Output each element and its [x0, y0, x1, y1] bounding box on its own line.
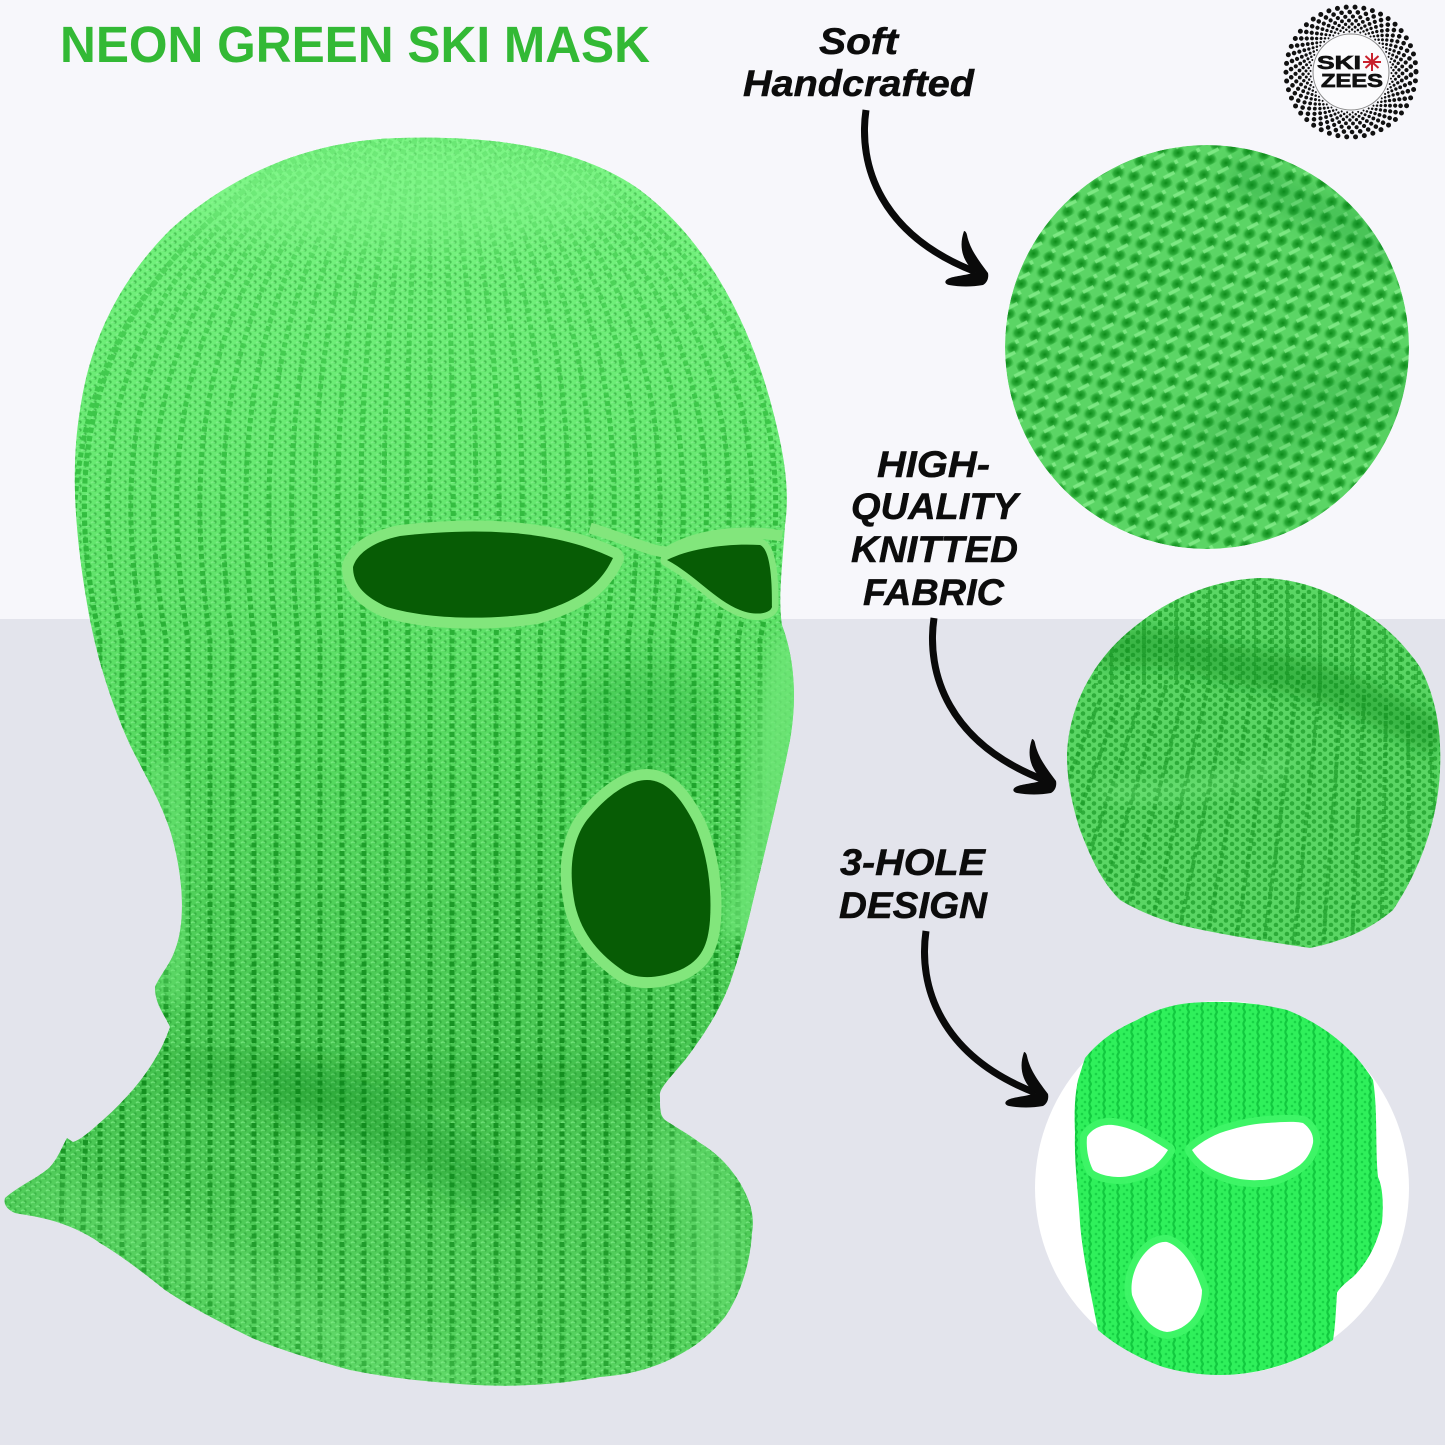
label: high-quality knitted fabric: HIGH- — [877, 444, 990, 485]
label: high-quality knitted fabric — [851, 444, 1021, 613]
logo: Ski Zees: SKI — [1317, 53, 1361, 73]
label: 3-hole design — [839, 842, 988, 926]
label: 3-hole design: 3-HOLE — [840, 842, 986, 883]
right eye hole — [667, 545, 772, 614]
eye bridge rim — [590, 528, 782, 552]
label: high-quality knitted fabric: QUALITY — [851, 486, 1021, 527]
mouth hole — [572, 780, 710, 977]
logo: Ski Zees: ZEES — [1321, 71, 1383, 91]
label: soft handcrafted — [743, 21, 975, 104]
arrow: handcrafted — [864, 110, 988, 286]
label: soft handcrafted: Soft — [819, 21, 900, 62]
detail circle: knit texture — [1005, 145, 1420, 549]
left eye hole — [353, 531, 613, 618]
label: 3-hole design: DESIGN — [839, 885, 988, 926]
detail circle: fabric close-up — [1067, 578, 1440, 948]
arrow: 3-hole design — [924, 931, 1048, 1108]
detail circle: front view of mask — [1035, 1001, 1409, 1375]
title: NEON GREEN SKI MASK — [60, 16, 650, 73]
logo: Ski Zees — [1286, 7, 1416, 137]
label: soft handcrafted: Handcrafted — [743, 63, 975, 104]
label: high-quality knitted fabric: FABRIC — [863, 572, 1005, 613]
arrow: knitted fabric — [932, 618, 1056, 794]
main ski mask illustration — [4, 138, 794, 1386]
label: high-quality knitted fabric: KNITTED — [851, 529, 1018, 570]
